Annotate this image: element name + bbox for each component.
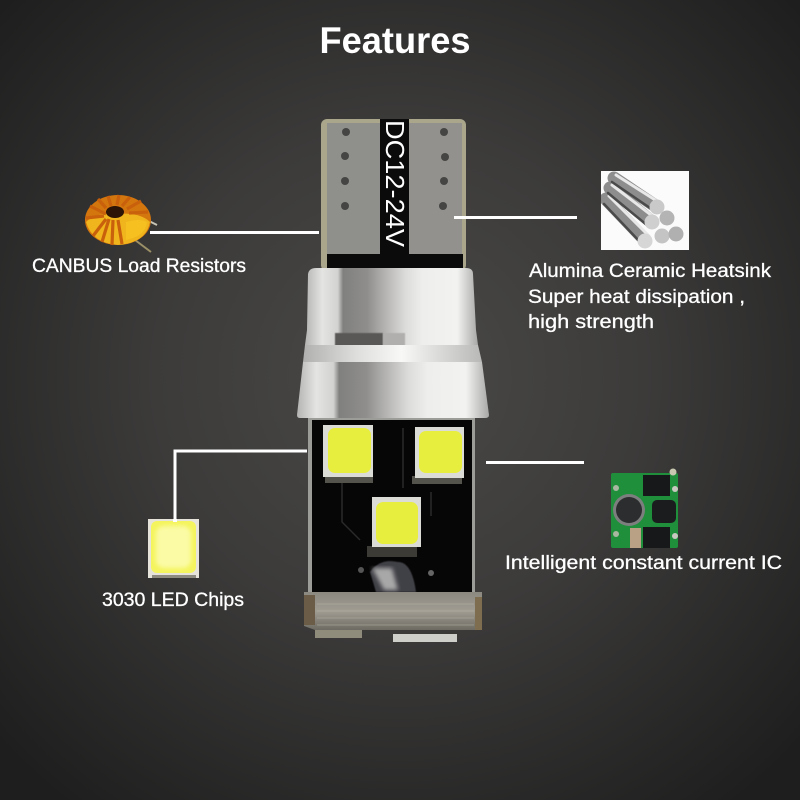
label: CANBUS Load Resistors: CANBUS Load Resistors — [32, 256, 246, 277]
solder joint — [370, 561, 416, 592]
connector line: heatsink — [454, 216, 577, 219]
LED chip 1 — [323, 425, 373, 483]
label: heatsink text block: Super heat dissipation , — [528, 287, 745, 308]
label: Intelligent constant current IC: Intelligent constant current IC — [505, 553, 782, 574]
LED bulb — [297, 119, 489, 642]
label: heatsink text block: Alumina Ceramic Heatsink — [529, 261, 772, 282]
connector line: load resistors — [150, 231, 319, 234]
icon: constant current IC board — [611, 468, 678, 548]
aluminium collar — [297, 268, 489, 418]
metal base contact — [304, 592, 482, 642]
icon: toroid load resistor coil — [85, 195, 157, 252]
voltage marking: DC12-24V — [380, 120, 410, 248]
label: 3030 LED Chips: 3030 LED Chips — [102, 590, 244, 611]
LED chip 2 — [412, 427, 464, 484]
label: heatsink text block: high strength — [528, 312, 654, 333]
icon: LED chip — [148, 519, 199, 578]
label: heatsink text block — [528, 261, 772, 333]
lower circuit board — [308, 418, 475, 594]
connector line: current IC — [486, 461, 584, 464]
icon: alumina rods photo — [601, 171, 689, 250]
LED chip 3 — [367, 497, 421, 557]
title: Features — [320, 20, 470, 61]
upper circuit board — [321, 119, 466, 271]
connector line: LED chips — [175, 451, 307, 520]
